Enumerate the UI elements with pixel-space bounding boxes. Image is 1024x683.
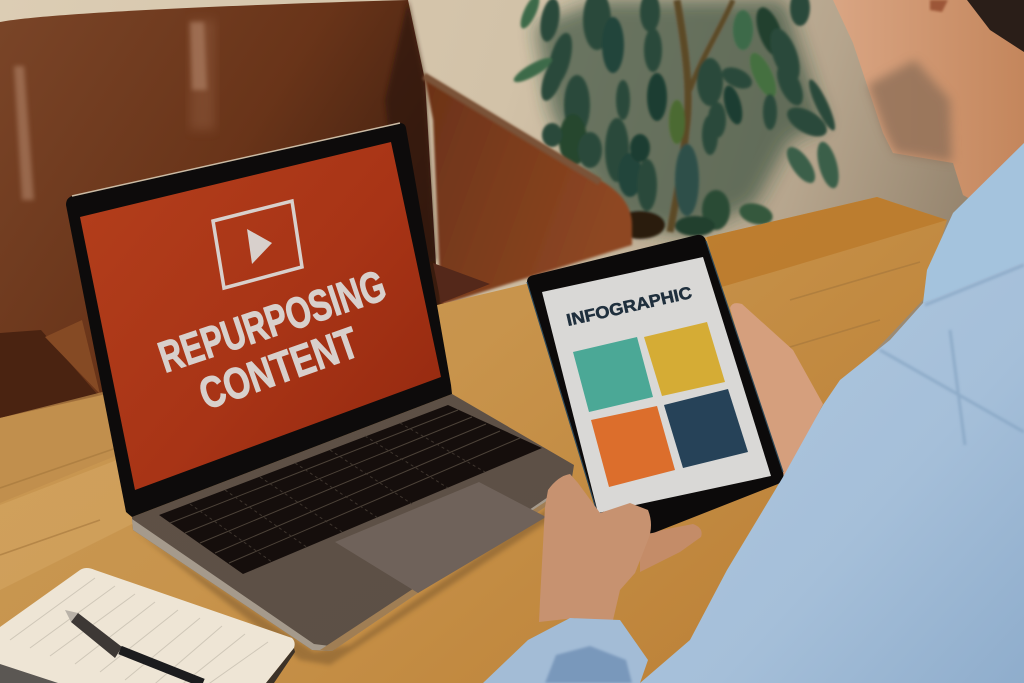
face and neck [833, 0, 1024, 230]
spiral binding [0, 664, 58, 683]
notebook with pen [0, 568, 295, 683]
left hand and thumb [539, 474, 651, 633]
sofa back [0, 0, 445, 420]
keyboard [159, 405, 542, 574]
sofa arm [424, 74, 632, 305]
screen title: REPURPOSING [153, 261, 392, 382]
right hand holding tablet [730, 303, 823, 478]
shirt [483, 143, 1024, 683]
cuff [483, 618, 648, 683]
shirt collar [923, 143, 1024, 303]
laptop screen [80, 142, 441, 490]
laptop lid [66, 123, 452, 517]
wooden table [0, 197, 947, 683]
icon: play button [213, 201, 302, 288]
navy tile [664, 389, 748, 468]
left hand fingers under tablet [640, 524, 702, 572]
plant [511, 0, 843, 239]
screen title: CONTENT [193, 318, 365, 419]
tablet [527, 235, 783, 533]
laptop base [132, 394, 574, 651]
yellow tile [644, 322, 725, 396]
teal tile [573, 337, 653, 412]
sofa seat [0, 330, 98, 418]
tablet heading: INFOGRAPHIC [565, 283, 694, 330]
tablet screen [542, 257, 771, 513]
person [640, 0, 1024, 572]
screen title [153, 261, 392, 419]
orange tile [591, 406, 675, 487]
hair [967, 0, 1024, 52]
sofa [0, 0, 632, 420]
pen [65, 610, 203, 683]
laptop [66, 123, 574, 651]
trackpad [335, 482, 546, 593]
shirt body [640, 262, 1024, 683]
